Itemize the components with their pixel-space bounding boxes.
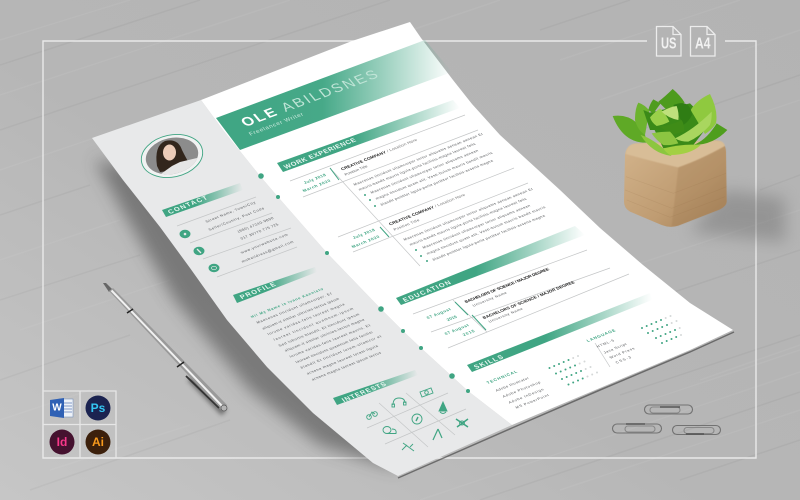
education section: University Name: [488, 307, 524, 323]
job entry 1: CREATIVE COMPANY / Location Here: [339, 137, 418, 171]
icon: Illustrator: Ai: [92, 435, 104, 449]
profile section: blandit Et tincidunt lorem-ullamcor et: [300, 334, 383, 369]
education section: 07 August: [425, 307, 452, 320]
portrait: [140, 134, 204, 178]
clip 1: [644, 405, 692, 414]
wooden pot: [624, 140, 727, 227]
profile section: acsena magna laoreet lorem-ligula: [306, 344, 380, 375]
job entry 1: March 2020: [301, 178, 332, 193]
profile section: PROFILE: [239, 282, 278, 301]
job entry 2: magna tincidunt quam elit. Vesti-bulum mauris bandit mauris: [426, 205, 546, 255]
language list: HTML-5: [596, 339, 615, 348]
language list: LANGUAGE: [585, 328, 617, 343]
icon: plane: [402, 443, 414, 451]
paper bottom edge shadow: [398, 332, 734, 478]
format icon: A4: A4: [695, 36, 711, 52]
plant: [613, 89, 727, 227]
contact section: mobaildress@gmail.com: [241, 240, 294, 263]
contact section: (980) 47240-9890: [237, 216, 275, 233]
education section: University Name: [472, 291, 508, 307]
icon: rocket: [439, 402, 447, 414]
job entry 2: [350, 187, 547, 262]
technical list: TECHNICAL: [485, 369, 519, 385]
profile section: laoreet tincidunt quamnum-ipsum: [273, 307, 354, 341]
format icon: US: [656, 26, 681, 56]
paper shadow: [95, 160, 400, 470]
header band: [216, 40, 452, 150]
icon: bicycle: [367, 412, 377, 419]
technical list: Adobe InDesign: [508, 388, 545, 404]
job entry 1: magna tincidunt quam elit. Vesti-bulum mauris bandit mauris: [375, 151, 494, 200]
education section: 2015: [445, 314, 458, 322]
format icon: A4: [690, 26, 715, 56]
contact section: Seller/Country, Post Code: [208, 207, 265, 231]
icon: web: [208, 264, 220, 272]
job entry 1: mauris-bandit mauris ligula-porta facilisis-magna laoreet felis: [358, 142, 477, 191]
job entry 1: July 2018: [302, 172, 328, 185]
job entry 2: Maecenas tincidunt ullamcorper tortor aliquams aenean aenean Et: [403, 187, 534, 241]
education section: EDUCATION: [402, 280, 453, 304]
succulent leaves: [613, 89, 727, 156]
language rating dots: [641, 315, 682, 344]
language list: Java Script: [603, 342, 628, 354]
contact section: www.yourwebsite.com: [240, 233, 289, 254]
profile section: acsena magna laoreet ipsum lectus: [311, 351, 382, 381]
timeline dots: [258, 173, 470, 393]
contact section: [162, 183, 297, 277]
job entry 2: March 2020: [350, 234, 381, 249]
icon: tools: [433, 429, 442, 440]
job entry 2: Maecenas tincidunt ullamcorper tortor aliquams aenean: [422, 204, 531, 249]
education section: BACHELORS OF SCIENCE / MAJOR DEGREE: [463, 267, 550, 304]
icon: cloud: [383, 426, 396, 434]
icon: InDesign: Id: [57, 435, 67, 449]
sidebar panel: [92, 100, 512, 476]
skills section: [467, 293, 682, 409]
language list: [585, 328, 636, 364]
paper clips: [612, 405, 720, 434]
technical list: [485, 369, 551, 409]
interests section: INTERESTS: [341, 381, 388, 404]
profile section: Sed lobortis blandit. Et tincidunt ipsum: [278, 313, 360, 347]
icon: phone: [194, 247, 204, 255]
job entry 1: Maecenas tincidunt ullamcorper tortor aliquams aenean: [370, 149, 479, 194]
main white panel: [201, 22, 733, 425]
job entry 1: [301, 132, 495, 207]
job entry 2: blandit porttitor ligula-porta porttitor facilisis-acsena magna: [432, 214, 547, 261]
icon: crossed tools: [456, 419, 468, 427]
contact section: 017 30770 775 725: [240, 223, 279, 240]
profile section: Hi! My Name is Ivane Kannisto: [249, 286, 325, 319]
technical list: MS PowerPoint: [515, 393, 551, 409]
resume sheet: [92, 22, 733, 476]
profile section: aliquam-it similar ultricies-lectus magna: [284, 318, 366, 352]
profile section: aliquam-it similar ultricies-lectus ipsum: [261, 297, 340, 330]
job entry 2: July 2018: [351, 227, 377, 240]
icon: Photoshop: Ps: [91, 401, 106, 415]
contact section: CONTACT: [167, 195, 210, 216]
icon: location: [180, 230, 190, 238]
job entry 2: Position Title: [393, 219, 420, 231]
interests section: [333, 370, 468, 451]
education section: BACHELORS OF SCIENCE / MAJOR DEGREE: [481, 280, 576, 320]
job entry 2: mauris-bandit mauris ligula-porta facilisis-magna laoreet felis: [409, 197, 528, 246]
technical list: Adobe Photoshop: [502, 381, 541, 398]
software icon grid: [43, 391, 116, 458]
profile section: lorume varidas-felis laoreet mauris. Et: [289, 323, 372, 358]
profile section: Maecenas tincidunt ullamcorper. Et: [256, 292, 334, 324]
format icon: US: US: [661, 36, 677, 52]
clip 2: [612, 424, 662, 433]
pen: [103, 283, 227, 413]
work experience section: WORK EXPERIENCE: [283, 137, 358, 171]
skills section: SKILLS: [473, 354, 506, 371]
name: OLE ABILDSNES: [238, 68, 382, 130]
profile section: [233, 267, 383, 381]
work experience section: [277, 100, 547, 266]
pot shadow: [690, 190, 785, 242]
language list: Word Press: [609, 347, 636, 359]
education section: 07 August: [443, 323, 470, 336]
education section: [396, 226, 629, 348]
job title: Freelancer Writer: [248, 112, 305, 137]
icon: compass: [412, 414, 422, 424]
education section: 2015: [461, 328, 476, 337]
icon: camera: [420, 388, 433, 397]
profile section: laoreet tincidunt quamnum felis facilisi: [295, 331, 374, 364]
job entry 1: Position Title: [344, 165, 369, 176]
job entry 2: CREATIVE COMPANY / Location Here: [387, 192, 466, 226]
job entry 1: Maecenas tincidunt ullamcorper tortor aliquams aenean aenean Et: [353, 132, 484, 186]
icon: Word: W: [52, 402, 62, 414]
language list: CSS-3: [615, 356, 632, 364]
clip 3: [672, 426, 720, 434]
icon: headphones: [392, 398, 406, 407]
job entry 1: blandit porttitor ligula-porta porttitor facilisis-acsena magna: [380, 159, 495, 206]
technical rating dots: [548, 355, 598, 386]
contact section: Street Name, Town/City: [205, 201, 257, 223]
frame: [43, 41, 756, 458]
technical list: Adobe Illustrator: [495, 376, 530, 392]
profile section: lorume varidas-felis laoreet magna: [267, 302, 346, 336]
